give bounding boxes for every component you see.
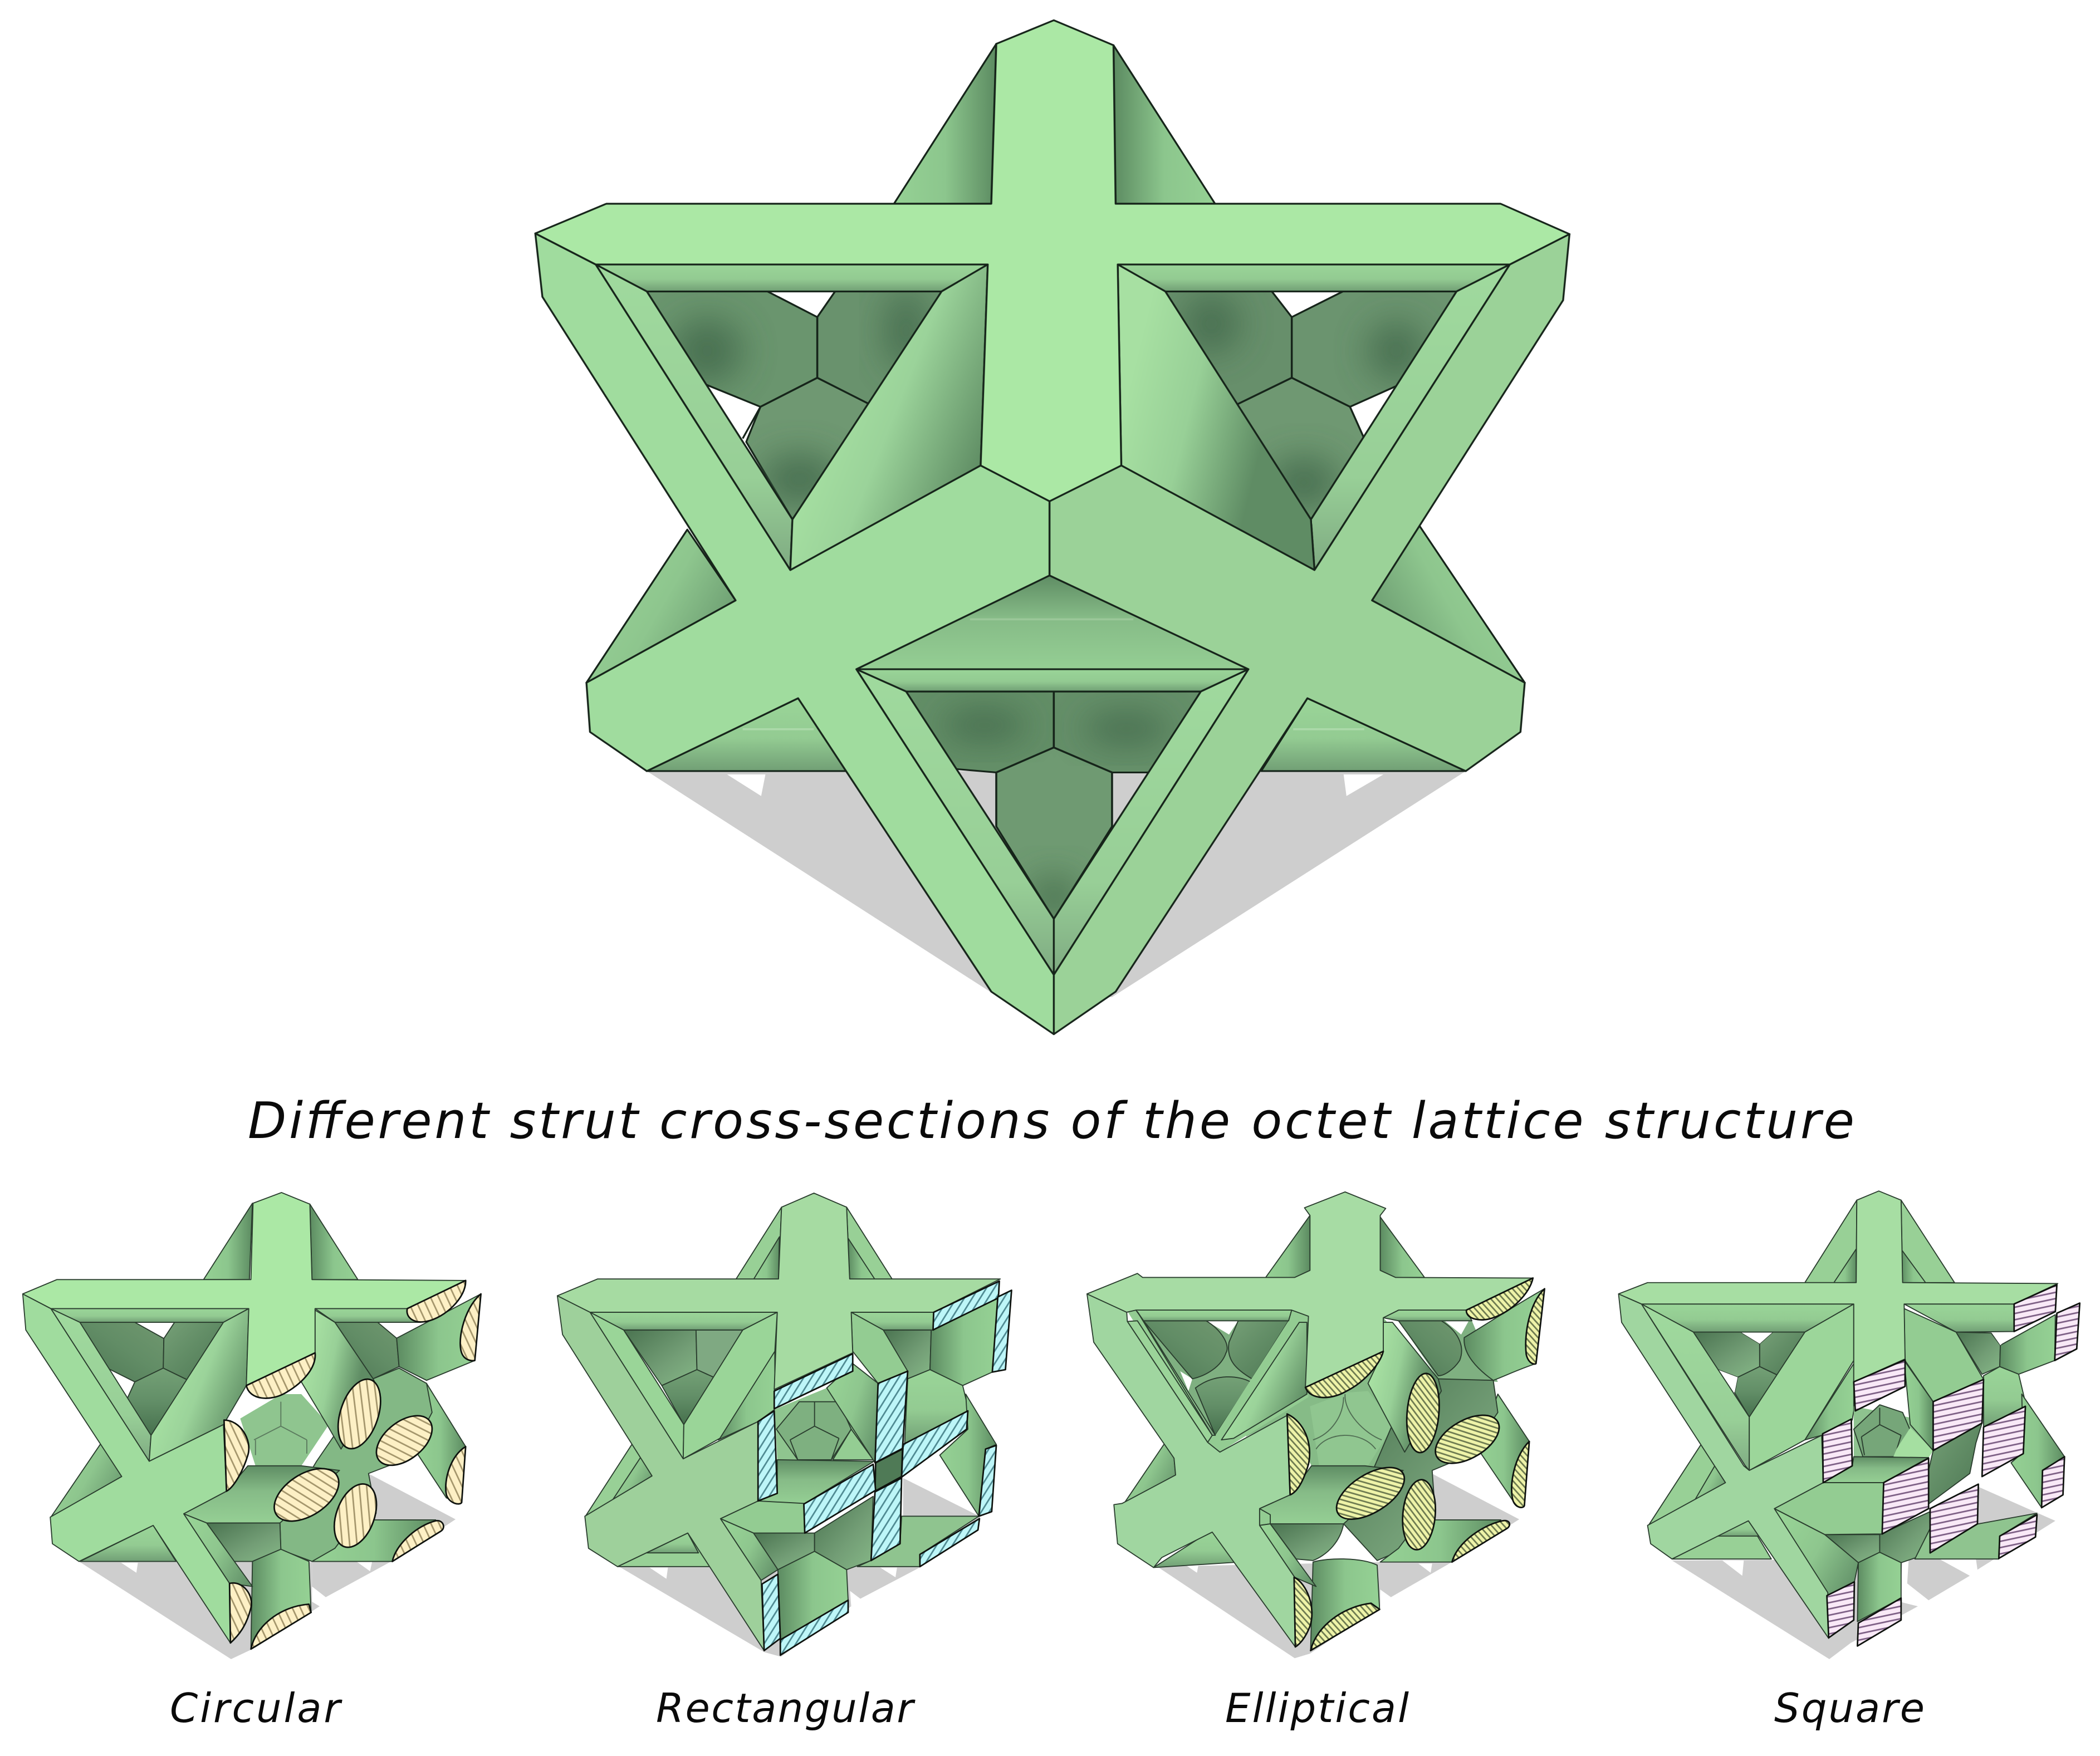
panel: circular cross-section lattice xyxy=(23,1193,481,1659)
shadow xyxy=(80,1470,456,1659)
opening bevels xyxy=(596,264,1510,975)
inner nodes right xyxy=(335,1294,481,1380)
label: elliptical: Elliptical xyxy=(1225,1685,1409,1732)
hatched square sections xyxy=(1823,1285,2080,1646)
front faces xyxy=(557,1193,1000,1651)
lower right struts xyxy=(1260,1379,1529,1651)
hatched elliptical sections xyxy=(1287,1278,1545,1651)
back wings xyxy=(1648,1200,1955,1559)
lower struts xyxy=(1774,1456,2037,1622)
dark centre cell xyxy=(875,1449,903,1491)
title: Different strut cross-sections of the octet lattice structure xyxy=(248,1092,1854,1150)
front faces xyxy=(535,20,1569,1034)
panel: elliptical cross-section lattice xyxy=(1087,1192,1545,1658)
hatched circular sections xyxy=(224,1281,481,1649)
inner nodes left xyxy=(624,1330,775,1440)
label: circular: Circular xyxy=(170,1685,342,1732)
label: square: Square xyxy=(1774,1685,1925,1732)
lower struts xyxy=(721,1460,979,1640)
inner nodes right xyxy=(883,1298,998,1516)
bevels xyxy=(590,1312,934,1581)
rails and bevels xyxy=(1127,1310,1472,1587)
shadow xyxy=(1157,1469,1519,1658)
inner nodes left xyxy=(1143,1321,1289,1435)
central small nodes xyxy=(1854,1405,1982,1504)
inner nodes seen through right opening xyxy=(1166,291,1457,519)
shadow xyxy=(619,1478,980,1657)
central small nodes xyxy=(240,1394,329,1466)
label: rectangular: Rectangular xyxy=(656,1685,916,1732)
ground shadow xyxy=(647,771,1466,997)
inner nodes left xyxy=(80,1322,223,1435)
back strut wings xyxy=(586,44,1525,771)
back wings xyxy=(51,1203,358,1562)
inner nodes right xyxy=(1398,1289,1545,1382)
inner nodes right xyxy=(1956,1314,2064,1508)
front faces xyxy=(1087,1192,1533,1647)
lower right struts xyxy=(184,1368,466,1649)
back wings xyxy=(1124,1215,1425,1567)
bevels xyxy=(51,1308,420,1587)
inner nodes seen through left opening xyxy=(647,290,942,519)
central lens nodes xyxy=(1310,1391,1394,1466)
panel: square cross-section lattice xyxy=(1618,1191,2080,1659)
bevels xyxy=(1642,1304,2014,1596)
central small nodes xyxy=(775,1363,878,1463)
shadow xyxy=(1672,1485,2055,1659)
hatched rectangular sections xyxy=(758,1281,1011,1655)
inner nodes left xyxy=(1693,1332,1854,1440)
main octet lattice unit cell xyxy=(535,20,1569,1034)
inner nodes seen through lower opening xyxy=(906,691,1201,921)
back wings xyxy=(585,1207,893,1567)
front faces xyxy=(23,1193,466,1643)
front faces xyxy=(1618,1191,2058,1639)
central backdrop xyxy=(1246,1318,1438,1468)
panel: rectangular cross-section lattice xyxy=(557,1193,1011,1657)
